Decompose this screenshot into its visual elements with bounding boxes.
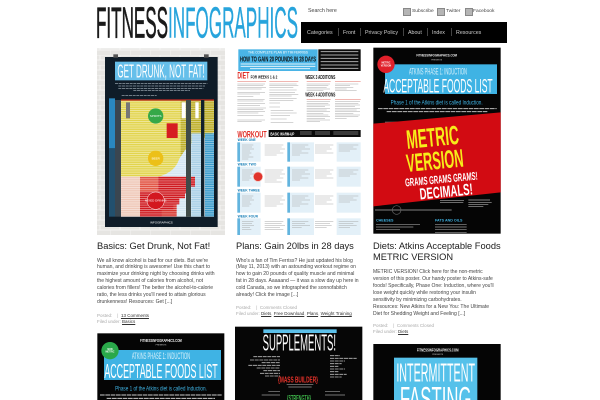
poster image: Intermittent Fasting: PRESENTS [432,354,444,356]
card meta: Filed under: Diets [373,329,408,334]
navigation bar: Privacy Policy [365,30,398,36]
card excerpt: how to gain 20 pounds of quality muscle and minimal [236,271,354,277]
card meta: Posted: | Comments Closed [236,305,297,310]
card excerpt: cold Canada, so we infographed the sonnofabitch [236,285,347,291]
navigation bar: About [408,30,422,36]
poster image: Intermittent Fasting: FITNESSINFOGRAPHICS.COM [417,347,459,352]
poster image: Gain 20lbs in 28 days: DIET [237,71,250,81]
poster image: Get Drunk, Not Fat: INFOGRAPHICS [150,220,173,224]
card excerpt: fat in 28 days. Aaaaand — it was a slow day up here in [236,278,359,284]
search field: Search here [308,8,337,14]
card meta [97,312,149,325]
card excerpt: Resources: New Atkins for a New You: The Ultimate [373,304,489,310]
card excerpt: version of this poster. Our handy poster to Atkins-safe [373,276,493,282]
poster image: Atkins Foods List: NON [107,349,113,351]
card meta [236,305,352,317]
poster image: Atkins Metric Version: CHEESES [376,219,394,223]
poster image: Gain 20lbs in 28 days: WEEK 3 ADDITIONS [305,75,336,81]
poster image: Atkins Foods List: PRESENTS [156,345,167,347]
navigation bar [301,22,507,43]
poster image: Atkins Foods List: FITNESSINFOGRAPHICS.COM [140,338,182,343]
card: Plans Gain 20lbs [236,240,359,317]
poster image: Supplements [235,326,362,400]
poster image: Gain 20lbs in 28 days: WORKOUT [237,129,267,139]
card excerpt: (May 11, 2013) with an astounding workout regime on [236,264,356,270]
card: Basics Get Drunk [97,240,215,325]
poster image: Atkins Foods List: METRIC [106,352,115,354]
poster image: Gain 20lbs in 28 days: FOR WEEKS 1 & 2 [251,75,278,80]
card excerpt: human, and drinking is awesome! Use this chart to [97,264,210,270]
poster image: Atkins Metric Version: METRIC [405,120,460,155]
card excerpt [97,258,215,305]
poster image: Get Drunk, Not Fat [97,48,225,235]
navigation bar: Resources [456,30,481,36]
poster image: Intermittent Fasting [373,344,501,400]
card excerpt [236,258,359,298]
poster image: Gain 20lbs in 28 days: BASIC WARM-UP [270,131,294,136]
poster image: Atkins Metric Version: FITNESSINFOGRAPHICS.COM [416,53,457,58]
card excerpt: calories from fillers! The better the alcohol-to-calorie [97,285,213,291]
poster image: Gain 20lbs in 28 days: WEEK 4 ADDITIONS [305,92,336,98]
poster image: Gain 20lbs in 28 days [237,49,361,235]
poster image: Gain 20lbs in 28 days: WEEK THREE [238,189,261,193]
card title [373,240,501,262]
poster image: Atkins Metric Version [373,48,501,234]
poster image: Gain 20lbs in 28 days: WEEK FOUR [238,214,259,218]
navigation bar: Categories [307,30,333,36]
card excerpt: Who's a fan of Tim Ferriss? He just updated his blog [236,258,353,264]
card excerpt: METRIC VERSION! Click here for the non-metric [373,269,483,275]
social links: Facebook [473,8,494,14]
poster image: Get Drunk, Not Fat: BEER [152,156,161,160]
card excerpt: Diet for Shedding Weight and Feeling [...] [373,311,465,317]
card excerpt [373,269,494,317]
card title: Basics: Get Drunk, Not Fat! [97,240,210,250]
poster image: Atkins Metric Version: PRESENTS [431,59,443,61]
card excerpt: ratio, the less drinks you'll need to attain glorious [97,292,206,298]
card excerpt: already! Click the image [...] [236,292,298,298]
card excerpt: drunkenness! Resources: Get [...] [97,299,172,305]
card meta: Posted: | 13 Comments [97,312,149,318]
card title: Plans: Gain 20lbs in 28 days [236,240,354,250]
navigation bar: Front [343,30,355,36]
card excerpt: maximize your drinking night by choosing drinks with [97,271,215,277]
card excerpt: We all know alcohol is bad for our diets. But we're [97,258,208,264]
poster image: Atkins Metric Version: FATS AND OILS [435,219,463,223]
navigation bar: Index [432,30,445,36]
poster image: Get Drunk, Not Fat: MIXED DRINKS [145,199,167,203]
card excerpt: sensitivity by minimizing carbohydrates. [373,297,462,303]
poster image: Atkins Metric Version: METRIC [382,63,391,65]
social links: Twitter [446,8,460,14]
card excerpt: lose weight quickly while restoring your insulin [373,290,476,296]
card meta: Posted: | Comments Closed [373,323,434,328]
card title: METRIC VERSION [373,252,453,262]
poster image: Get Drunk, Not Fat: SPIRITS [150,114,162,118]
poster image: Gain 20lbs in 28 days: WEEK ONE [238,138,257,142]
poster image: Supplements: {MASS BUILDER} [278,375,318,385]
card meta: Filed under: Basics [97,319,135,324]
poster image: Gain 20lbs in 28 days: THE COMPLETE PLAN BY TIM FERRISS [248,51,309,55]
card meta: Filed under: Diets, Free Download, Plans, Weight Training [236,311,352,316]
poster image: Atkins Foods List [97,333,224,400]
card meta [373,323,434,335]
social links [403,8,494,16]
social links: Subscribe [412,8,434,14]
card title: Diets: Atkins Acceptable Foods [373,240,501,250]
card excerpt: foods! Specifically, Phase One: Induction, where you'll [373,283,494,289]
card: Diets Atkins Metric [373,240,501,335]
poster image: Atkins Metric Version: DECIMALS! [419,181,474,203]
poster image: Gain 20lbs in 28 days: WEEK TWO [238,163,257,167]
poster image: Atkins Metric Version: VERSION [381,65,392,67]
card excerpt: the highest amount of calories from alcohol, not [97,278,203,284]
